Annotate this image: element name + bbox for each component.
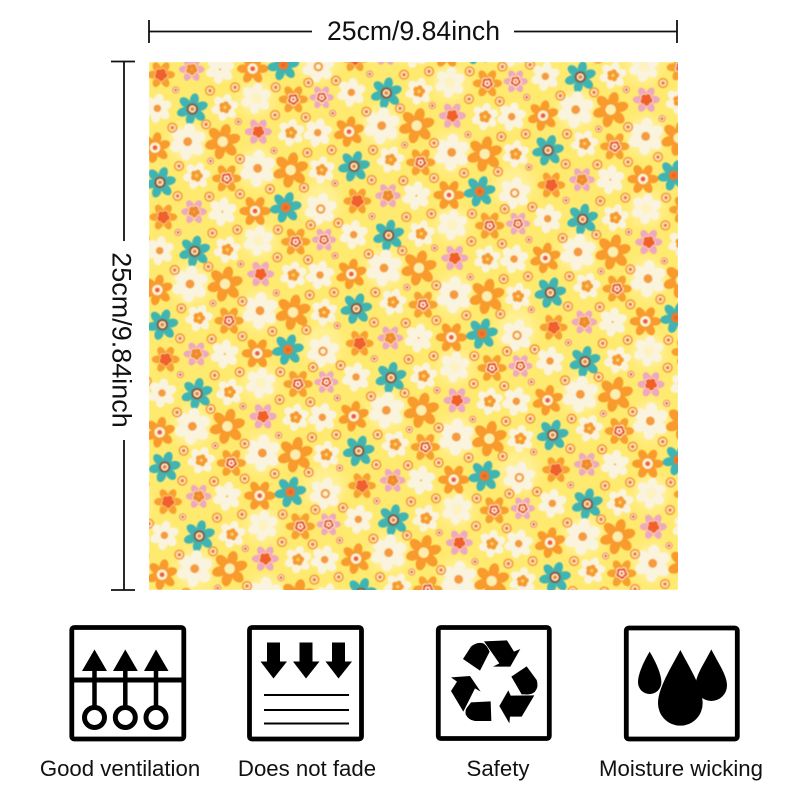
label: good ventilation: Good ventilation	[40, 756, 200, 781]
horizontal dimension: fabric width	[149, 16, 677, 46]
label: moisture wicking: Moisture wicking	[599, 756, 763, 781]
label: does not fade: Does not fade	[238, 756, 376, 781]
icon: does not fade	[250, 628, 362, 739]
icon: moisture wicking drops	[626, 628, 737, 739]
vertical dimension: fabric height	[106, 62, 136, 590]
icon: good ventilation	[72, 628, 184, 739]
icon: safety recycling symbol	[438, 628, 549, 738]
vertical dimension: fabric height: 25cm/9.84inch	[106, 252, 136, 428]
fabric swatch: yellow floral pattern	[149, 62, 678, 590]
horizontal dimension: fabric width: 25cm/9.84inch	[327, 16, 500, 46]
label: safety: Safety	[467, 756, 530, 781]
